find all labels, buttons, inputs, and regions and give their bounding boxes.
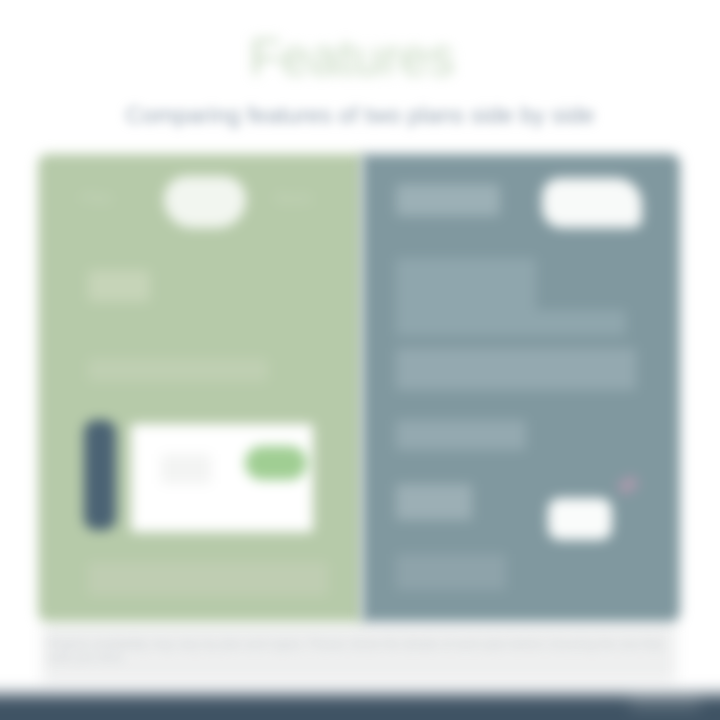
pink accent arrow <box>616 474 640 496</box>
right header logo <box>542 178 642 228</box>
bottom bar label <box>630 696 700 710</box>
subtitle: Comparing features of two plans side by side <box>126 102 594 128</box>
right text block two <box>396 310 626 336</box>
right bottom text <box>396 554 506 590</box>
card gray block <box>161 454 211 484</box>
left footer text <box>88 562 328 596</box>
dark phone icon <box>84 420 116 530</box>
right text block four <box>396 420 526 450</box>
right heading text <box>396 184 500 216</box>
footnote background band <box>42 624 676 682</box>
white screenshot card <box>131 424 313 532</box>
white small card <box>548 498 612 540</box>
green button <box>245 446 307 480</box>
left header logo <box>164 176 246 228</box>
panel: right slate <box>362 154 680 622</box>
bottom dark bar <box>0 694 720 720</box>
right text block one <box>396 258 536 310</box>
right text block three <box>396 348 636 390</box>
left description text <box>88 358 268 382</box>
right text block five <box>396 484 472 520</box>
left heading text <box>88 270 150 302</box>
left small label two: Basic <box>276 190 313 207</box>
panel: left green <box>38 154 362 622</box>
left small label one: Plan <box>82 190 112 207</box>
